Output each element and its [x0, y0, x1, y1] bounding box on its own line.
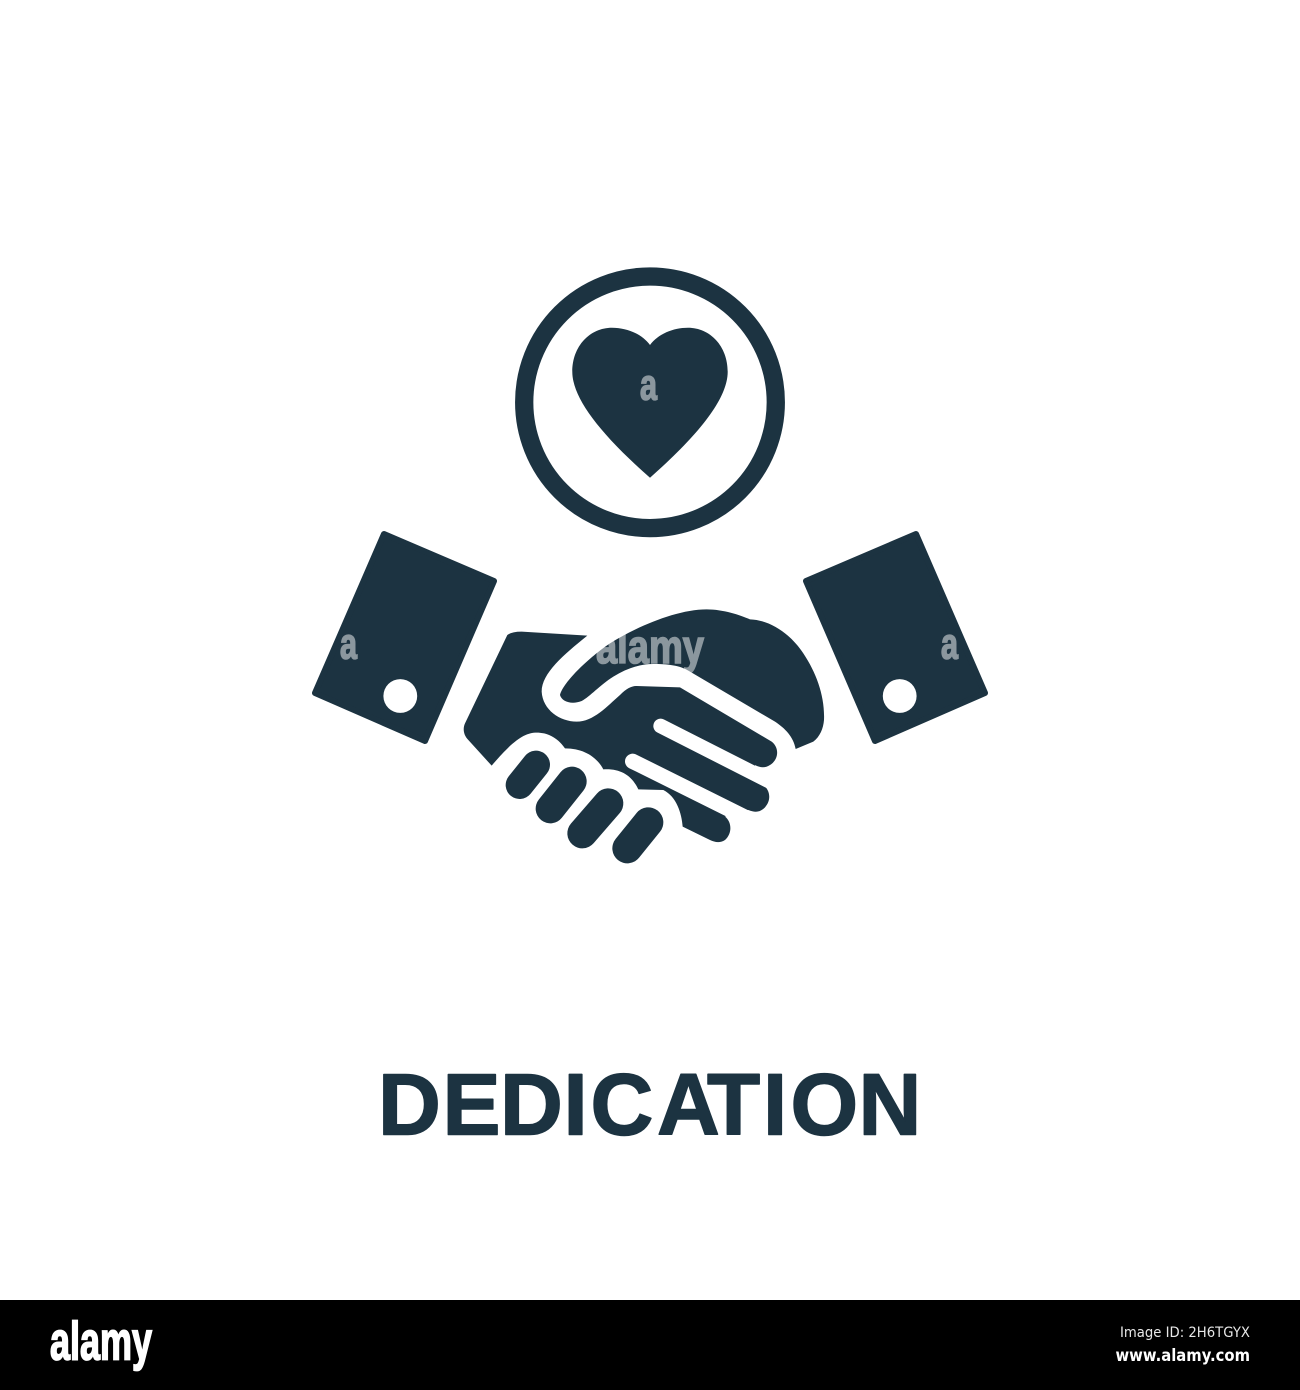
icon: handshake	[464, 609, 824, 848]
footer image id: Image ID: 2H6TGYX	[1120, 1325, 1250, 1341]
footer url: www.alamy.com	[1116, 1346, 1250, 1366]
icon: left sleeve cuff	[315, 534, 494, 741]
title: DEDICATION: DEDICATION	[378, 1056, 921, 1154]
watermark: alamy: a	[340, 620, 357, 668]
icon: heart in circle	[524, 276, 776, 528]
watermark: alamy: a	[640, 360, 657, 410]
icon: right sleeve cuff	[806, 534, 985, 741]
footer bar	[0, 1300, 1300, 1390]
watermark: alamy	[340, 360, 958, 673]
watermark: alamy: alamy	[596, 620, 704, 673]
watermark: alamy: a	[941, 620, 958, 668]
footer logo: alamy: alamy	[50, 1312, 152, 1372]
